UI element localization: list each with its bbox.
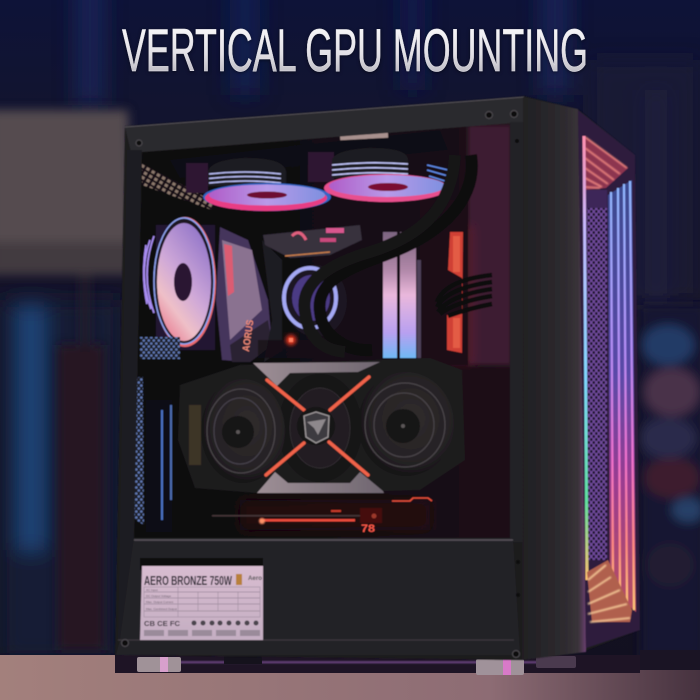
motherboard bottom with lights bbox=[212, 498, 432, 535]
case: left post bbox=[118, 150, 142, 640]
front panel: top RGB chevron bbox=[584, 136, 628, 190]
PCI brackets bbox=[146, 400, 172, 532]
PSU label: Max. Combined Output bbox=[146, 607, 177, 611]
motherboard I/O shroud bbox=[263, 225, 362, 258]
red light bar bbox=[447, 232, 463, 353]
case: top bar bbox=[125, 97, 526, 152]
case: top mesh bbox=[142, 163, 214, 210]
PSU spec table bbox=[144, 587, 260, 617]
front panel: vertical stripes bbox=[608, 180, 636, 612]
liquid cooling tube 2 bbox=[320, 155, 472, 350]
background: painting bbox=[640, 305, 700, 660]
liquid cooling tube 1 bbox=[304, 155, 455, 352]
CPU pump bbox=[258, 265, 358, 358]
PSU label bbox=[140, 566, 263, 640]
PSU label: AERO BRONZE 750W bbox=[144, 573, 232, 588]
case: interior bbox=[134, 122, 512, 540]
front panel: mesh bbox=[587, 208, 607, 560]
table bbox=[0, 650, 700, 700]
case: screws bbox=[122, 110, 520, 658]
RAM sticks bbox=[383, 232, 421, 358]
POST code digits: 78 bbox=[361, 523, 375, 535]
vertical GPU bbox=[178, 358, 465, 494]
AORUS logo text: AORUS bbox=[241, 319, 256, 352]
GPU orange X bars bbox=[266, 377, 369, 475]
PSU label: Max. Output Current bbox=[146, 600, 173, 604]
PSU label: DC Output Voltage bbox=[146, 594, 171, 598]
PSU label: Aero bbox=[248, 576, 262, 582]
right top fan bbox=[324, 174, 448, 202]
case: PSU shroud bbox=[116, 538, 520, 655]
GPU fan center bbox=[278, 374, 362, 482]
background: floor lamp bbox=[0, 110, 134, 650]
front panel: edge light bbox=[584, 136, 587, 580]
case: body silhouette bbox=[115, 96, 640, 660]
CPU cooler with AORUS shroud bbox=[216, 227, 282, 362]
side panel screws bbox=[515, 139, 520, 597]
side panel bbox=[522, 97, 586, 660]
right radiator fan ring bbox=[332, 148, 448, 182]
radiator rail bbox=[170, 130, 448, 178]
case: right post bbox=[510, 122, 523, 542]
blue mesh bbox=[140, 337, 180, 359]
GPU Aorus badge bbox=[297, 407, 335, 445]
GPU silver frame bottom bbox=[257, 472, 384, 493]
GPU fan right bbox=[358, 372, 454, 476]
PC case bbox=[115, 96, 640, 660]
front panel: bottom RGB chevron bbox=[587, 560, 632, 622]
feet bbox=[137, 656, 576, 675]
GPU fan left bbox=[201, 379, 285, 483]
GPU body bbox=[178, 358, 465, 494]
GPU silver frame top bbox=[253, 362, 380, 386]
front panel frame bbox=[578, 110, 640, 648]
left radiator fan ring bbox=[208, 158, 286, 186]
PSU certification icons: CB CE FC bbox=[144, 621, 180, 628]
rear fan bbox=[144, 217, 216, 350]
motherboard bbox=[447, 232, 463, 353]
power cables bbox=[437, 275, 492, 316]
radiator fans bbox=[170, 130, 448, 211]
PCI slot mesh bbox=[127, 377, 144, 525]
PSU label: AC Input bbox=[146, 588, 158, 592]
left top fan bbox=[203, 183, 331, 211]
